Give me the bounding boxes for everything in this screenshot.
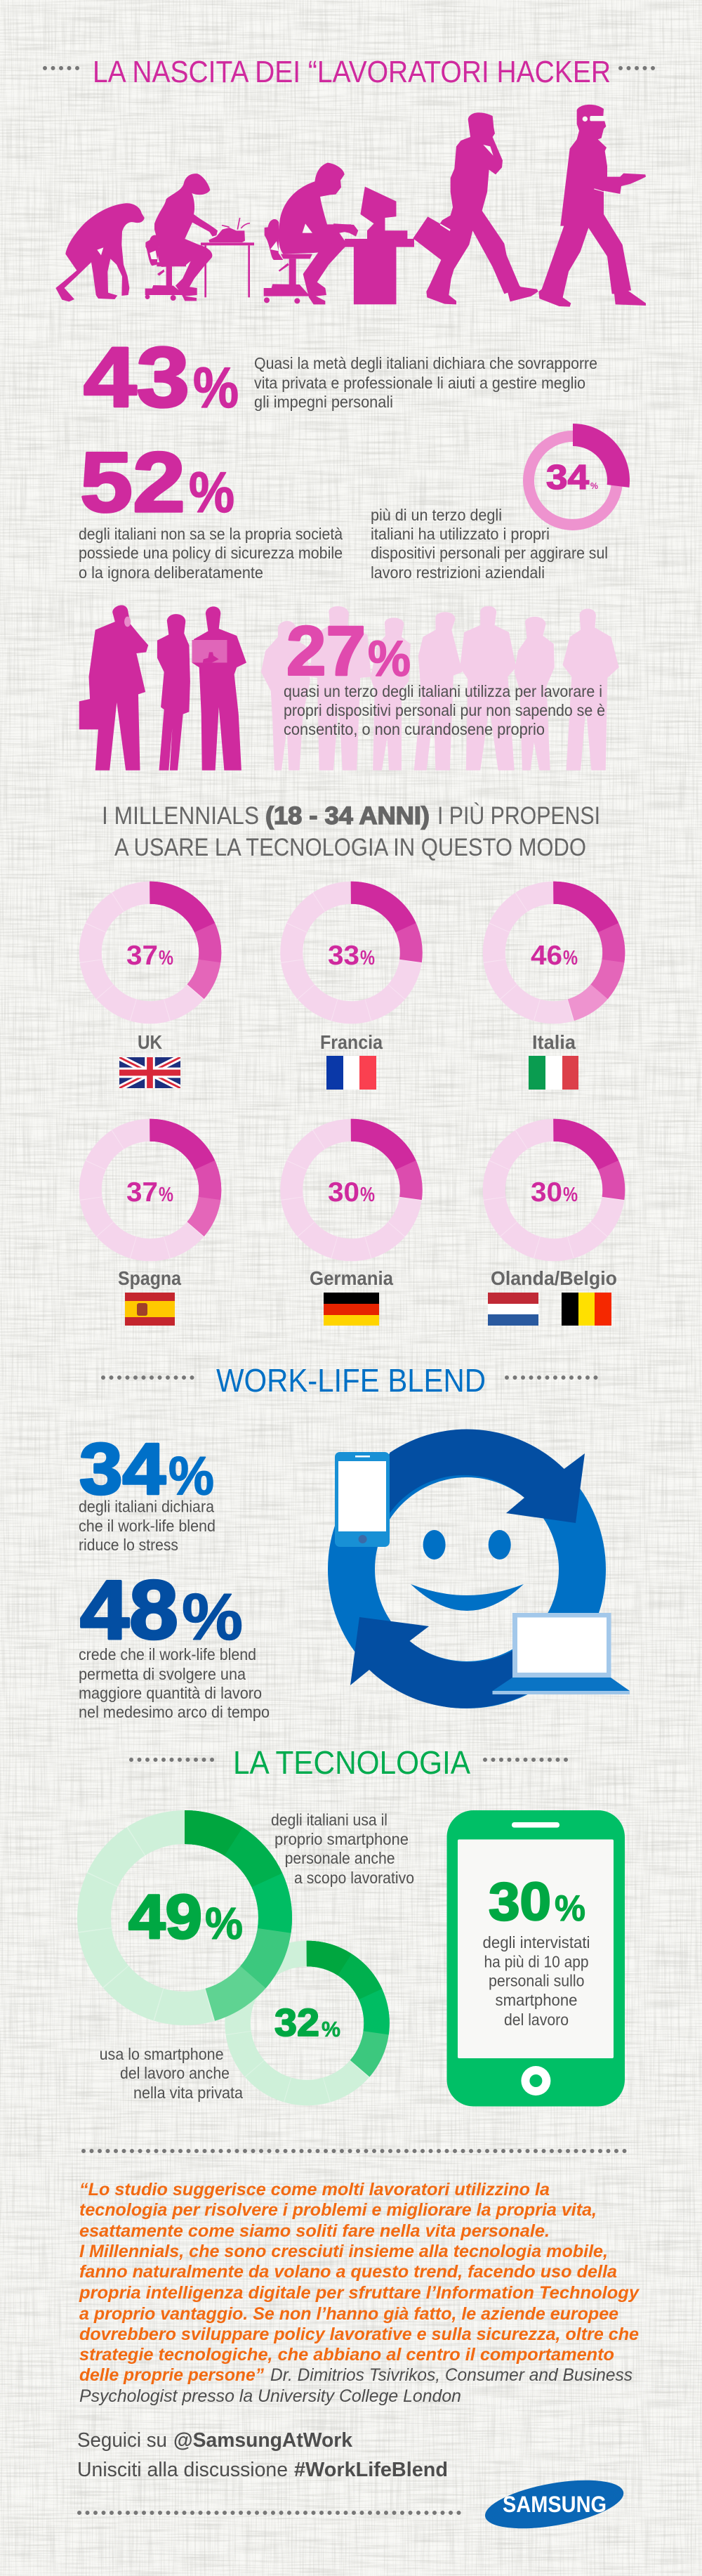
text: smartphone personale: proprio smartphone <box>274 1830 409 1848</box>
stat: 34% stress: riduce lo stress <box>79 1536 178 1554</box>
donut: 34%: 34 <box>546 459 589 497</box>
stat: 43%: gli impegni personali <box>254 393 393 411</box>
stat: 27%: % <box>368 632 411 687</box>
computer desk and monitor <box>331 187 414 304</box>
panel: Olanda/Belgio: 30 <box>531 1177 562 1208</box>
stat: 43% <box>84 329 597 424</box>
stat: 27%: propri dispositivi personali pur non sapendo se è <box>284 701 605 719</box>
donut: 34% <box>529 424 630 525</box>
stat: 52%: % <box>189 461 234 525</box>
title: la nascita dei lavoratori hacker: LA NASCITA DEI “LAVORATORI HACKER <box>93 55 611 89</box>
stat: 27%: consentito, o non curandosene proprio <box>284 720 545 738</box>
heading: millennials <box>102 802 600 861</box>
text: smartphone del lavoro <box>100 2045 243 2102</box>
stat: 27%: quasi un terzo degli italiani utilizza per lavorare i <box>284 682 602 700</box>
panel: Olanda/Belgio: % <box>563 1184 578 1206</box>
stat: 27% <box>284 611 605 738</box>
panel: Spagna <box>91 1130 210 1326</box>
stat: 43%: % <box>193 356 239 420</box>
donut: Francia 33% <box>291 893 411 1012</box>
social links: @SamsungAtWork <box>173 2429 353 2452</box>
stat: 52% <box>79 434 343 582</box>
donut: Olanda/Belgio 30% <box>494 1130 614 1250</box>
figure: hacker with goggles and smartphone <box>538 105 646 307</box>
text: smartphone del lavoro: usa lo smartphone <box>100 2045 224 2063</box>
quote: delle proprie persone” <box>79 2365 264 2385</box>
quote: tecnologia per risolvere i problemi e migliorare la propria vita, <box>79 2200 597 2220</box>
donut: 49%: 49 <box>128 1881 202 1951</box>
text: smartphone personale: a scopo lavorativo <box>294 1869 414 1887</box>
social links <box>77 2429 448 2481</box>
text: più di un terzo: più di un terzo degli <box>371 506 502 524</box>
quote: propria intelligenza digitale per sfruttare l’Information Technology <box>79 2283 640 2303</box>
stat: 43%: Quasi la metà degli italiani dichiara che sovrapporre <box>254 354 597 372</box>
donut: Spagna 37% <box>91 1130 210 1250</box>
figure: man at computer <box>264 163 351 304</box>
quote: dovrebbero sviluppare policy lavorative e sulla sicurezza, oltre che <box>79 2325 639 2344</box>
heading: millennials: I MILLENNIALS <box>102 802 259 830</box>
text: smartphone personale: personale anche <box>285 1849 395 1867</box>
stat: 48% workload: permetta di svolgere una <box>79 1665 246 1683</box>
quote: esattamente come siamo soliti fare nella vita personale. <box>79 2221 550 2241</box>
stat: 52%: possiede una policy di sicurezza mobile <box>79 544 343 562</box>
quote: Dr. Dimitrios Tsivrikos, Consumer and Business <box>270 2365 633 2385</box>
text: smartphone personale: degli italiani usa il <box>271 1811 388 1829</box>
donut: 34%: % <box>590 480 598 491</box>
flag: Netherlands <box>488 1293 538 1326</box>
panel: Francia: 33 <box>328 941 359 971</box>
stat: 48% workload: crede che il work-life blend <box>79 1645 256 1663</box>
panel: Olanda/Belgio: Olanda/Belgio <box>491 1267 617 1289</box>
dark business people silhouettes <box>79 606 246 771</box>
stat: 52%: degli italiani non sa se la propria società <box>79 525 343 543</box>
quote <box>79 2180 640 2406</box>
stat: 48% workload: nel medesimo arco di tempo <box>79 1703 270 1721</box>
social links: Unisciti alla discussione <box>77 2459 288 2481</box>
icon: smartphone <box>335 1452 390 1547</box>
panel: Olanda/Belgio <box>488 1130 617 1326</box>
stat: 52%: 52 <box>80 434 185 530</box>
panel: Spagna: % <box>159 1184 173 1206</box>
donut: 49%: % <box>205 1898 243 1949</box>
stat: 34% stress: % <box>168 1446 214 1506</box>
heading: work-life blend: WORK-LIFE BLEND <box>216 1362 486 1399</box>
stat: 48% workload <box>79 1564 270 1721</box>
text: più di un terzo <box>371 506 608 582</box>
stat: 43%: vita privata e professionale li aiuti a gestire meglio <box>254 374 585 392</box>
heading: millennials: I PIÙ PROPENSI <box>437 802 600 830</box>
flag: Belgium <box>562 1293 611 1326</box>
Samsung logo <box>482 2471 627 2537</box>
flag: Italy <box>529 1056 578 1090</box>
panel: Germania: % <box>360 1184 375 1206</box>
stat: 43%: 43 <box>84 329 190 424</box>
panel: Italia <box>494 893 614 1090</box>
panel: UK <box>91 893 210 1088</box>
icon: green smartphone with 30%: 30 <box>489 1872 551 1932</box>
quote: strategie tecnologiche, che abbiano al centro il comportamento <box>79 2345 614 2365</box>
panel: Italia: 46 <box>531 941 562 971</box>
heading: millennials: A USARE LA TECNOLOGIA IN QUESTO MODO <box>114 834 586 861</box>
panel: Italia: Italia <box>532 1031 576 1053</box>
figure: man with phone and briefcase <box>413 112 538 304</box>
panel: Germania <box>291 1130 411 1326</box>
quote: fanno naturalmente da volano a questo trend, facendo uso della <box>79 2262 617 2282</box>
icon: green smartphone with 30%: degli intervistati <box>483 1933 590 1951</box>
social links: Seguici su <box>77 2429 167 2452</box>
stat: 34% stress: che il work-life blend <box>79 1517 216 1535</box>
evolution silhouettes left <box>55 163 351 304</box>
icon: green smartphone with 30%: personali sullo <box>489 1971 584 1989</box>
donut: Italia 46% <box>494 893 614 1012</box>
icon: green smartphone with 30% <box>446 1810 625 2106</box>
social links: #WorkLifeBlend <box>294 2459 448 2481</box>
stat: 34% stress <box>79 1429 216 1554</box>
stat: 48% workload: 48 <box>80 1564 178 1656</box>
donut: 49% <box>94 1827 275 2008</box>
text: più di un terzo: lavoro restrizioni aziendali <box>371 563 545 582</box>
stat: 48% workload: maggiore quantità di lavoro <box>79 1684 262 1702</box>
stat: 34% stress: degli italiani dichiara <box>79 1498 214 1516</box>
donut: 32%: % <box>322 2017 340 2041</box>
evolution silhouettes right <box>413 105 646 307</box>
light crowd silhouettes <box>261 606 619 771</box>
figure: ape <box>55 203 145 301</box>
icon: green smartphone with 30%: del lavoro <box>504 2011 569 2029</box>
panel: Spagna: 37 <box>126 1177 158 1208</box>
donut: Germania 30% <box>291 1130 411 1250</box>
flag: UK <box>119 1057 180 1088</box>
icon: laptop <box>493 1613 630 1694</box>
panel: Germania: Germania <box>310 1267 393 1289</box>
panel: UK: UK <box>138 1031 162 1053</box>
text: più di un terzo: dispositivi personali per aggirare sul <box>371 544 608 562</box>
flag: Germany <box>324 1293 379 1326</box>
stat: 52%: o la ignora deliberatamente <box>79 563 263 582</box>
donut: 32% <box>238 1954 377 2093</box>
panel: Francia: % <box>360 947 375 969</box>
panel: Francia: Francia <box>320 1031 383 1053</box>
icon: green smartphone with 30%: smartphone <box>496 1991 577 2009</box>
icon: green smartphone with 30%: % <box>555 1888 585 1929</box>
quote: “Lo studio suggerisce come molti lavoratori utilizzino la <box>79 2180 550 2199</box>
panel: Germania: 30 <box>328 1177 359 1208</box>
quote: Psychologist presso la University College London <box>79 2386 461 2406</box>
panel: Italia: % <box>563 947 578 969</box>
quote: I Millennials, che sono cresciuti insieme alla tecnologia mobile, <box>79 2242 608 2261</box>
panel: Francia <box>291 893 411 1090</box>
icon: green smartphone with 30%: ha più di 10 app <box>484 1953 588 1971</box>
flag: France <box>326 1056 376 1090</box>
panel: Spagna: Spagna <box>118 1267 181 1289</box>
heading: la tecnologia: LA TECNOLOGIA <box>233 1744 470 1781</box>
panel: UK: % <box>159 947 173 969</box>
donut: 32%: 32 <box>274 2001 319 2044</box>
quote: a proprio vantaggio. Se non l’hanno già fatto, le aziende europee <box>79 2304 618 2324</box>
stat: 34% stress: 34 <box>79 1429 166 1509</box>
panel: UK: 37 <box>126 941 158 971</box>
text: più di un terzo: italiani ha utilizzato i propri <box>371 525 550 543</box>
stat: 48% workload: % <box>182 1580 243 1654</box>
text: smartphone personale <box>271 1811 414 1887</box>
text: smartphone del lavoro: del lavoro anche <box>120 2064 230 2082</box>
figure: typist at typewriter <box>145 174 254 301</box>
icon: smiley with cycle arrows and devices <box>335 1430 630 1708</box>
text: smartphone del lavoro: nella vita privata <box>133 2084 243 2102</box>
stat: 27%: 27 <box>286 611 366 690</box>
Samsung logo: SAMSUNG <box>503 2492 607 2517</box>
flag: Spain <box>125 1293 175 1326</box>
heading: millennials: (18 - 34 ANNI) <box>265 802 430 830</box>
donut: UK 37% <box>91 893 210 1012</box>
